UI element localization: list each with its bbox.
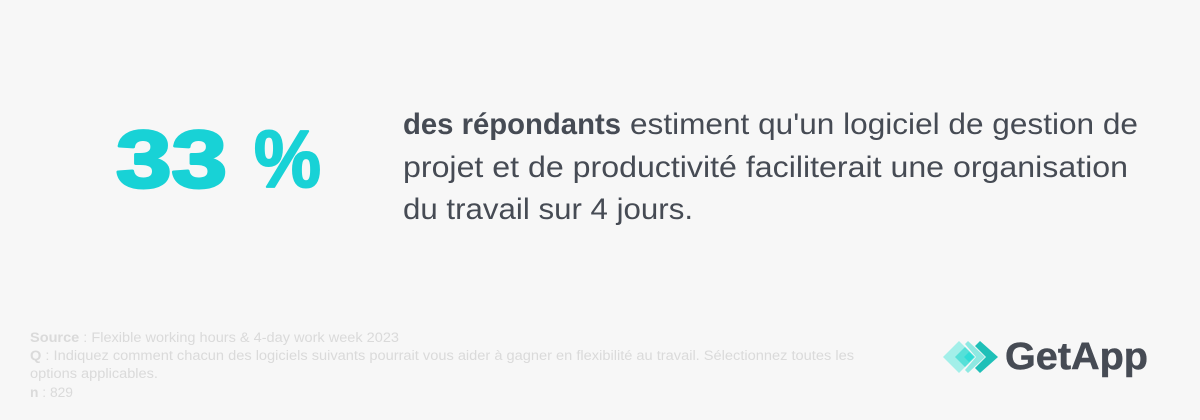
source footnote: options applicables. xyxy=(30,366,158,381)
main statement text: projet et de productivité faciliterait une organisation xyxy=(403,151,1128,184)
big statistic: 33 %: 33 xyxy=(116,115,227,205)
main statement text: estiment qu'un logiciel de gestion de xyxy=(630,108,1138,141)
GetApp logo xyxy=(943,336,1148,378)
main statement text xyxy=(403,108,1138,226)
source footnote xyxy=(30,330,854,400)
source footnote: n : 829 xyxy=(30,385,73,400)
source footnote: Source : Flexible working hours & 4-day work week 2023 xyxy=(30,330,399,345)
source footnote: Q : Indiquez comment chacun des logiciels suivants pourrait vous aider à gagner en flexibilité au travail. Sélectionnez toutes les xyxy=(30,348,854,363)
big statistic: 33 %: % xyxy=(254,115,321,205)
wordmark: GetApp xyxy=(1005,336,1148,378)
main statement text: du travail sur 4 jours. xyxy=(403,193,693,226)
big statistic: 33 % xyxy=(116,115,321,205)
line 1: des répondants xyxy=(403,108,621,141)
icon: diamonds and chevrons xyxy=(943,341,998,373)
